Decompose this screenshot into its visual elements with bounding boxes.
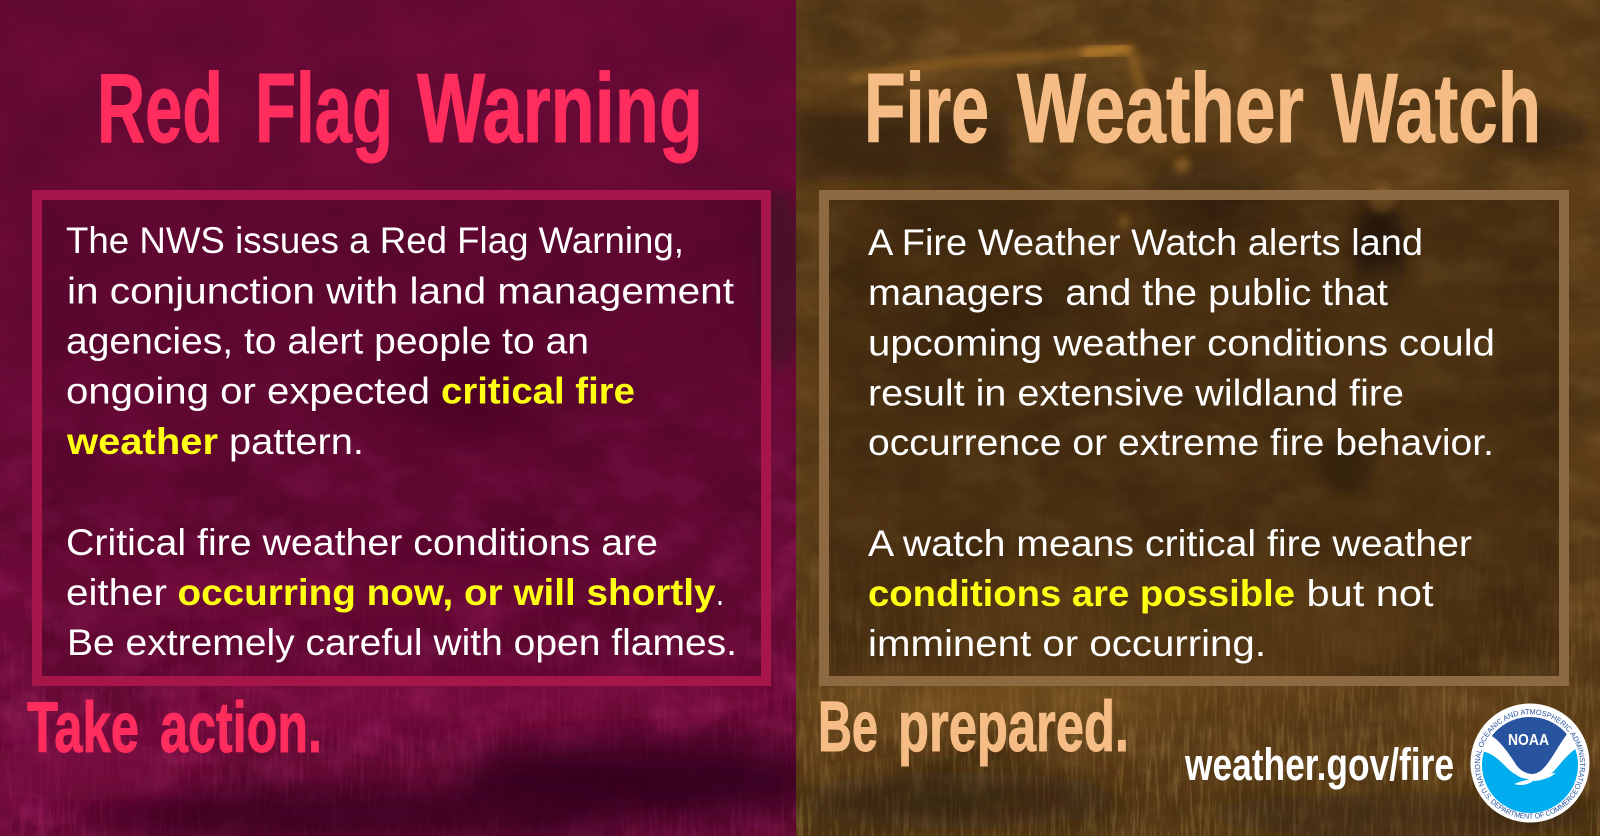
tagline: be prepared: Be	[818, 688, 878, 767]
box: fire weather watch description	[824, 195, 1564, 681]
text: second paragraph: either	[66, 572, 167, 613]
text: first paragraph: result in extensive wildland fire	[868, 372, 1404, 414]
text: first paragraph: weather	[66, 421, 218, 462]
text: first paragraph: upcoming weather conditions could	[868, 322, 1495, 364]
tagline: take action: Take	[27, 689, 139, 768]
text: second paragraph: conditions are possible	[868, 573, 1295, 614]
text: second paragraph: Critical fire weather conditions are	[66, 522, 658, 563]
text: second paragraph: imminent or occurring.	[868, 623, 1266, 664]
text: second paragraph	[66, 522, 737, 663]
heading: red flag warning: Flag	[255, 53, 393, 163]
url: weather.gov/fire: weather.gov/fire	[1184, 739, 1454, 790]
tagline: take action	[27, 689, 322, 768]
heading: red flag warning: Red	[97, 53, 223, 163]
icon: NOAA logo: NOAA	[1508, 732, 1549, 749]
text: first paragraph: occurrence or extreme fire behavior.	[868, 422, 1494, 463]
heading: red flag warning: Warning	[417, 53, 703, 163]
tagline: be prepared	[818, 688, 1129, 767]
text: second paragraph: .	[716, 572, 724, 613]
text: second paragraph: Be extremely careful with open flames.	[67, 622, 737, 663]
text: first paragraph: The NWS issues a Red Flag Warning,	[66, 220, 684, 261]
background: magenta-tinted fire photo	[0, 0, 830, 836]
panel: fire weather watch	[796, 0, 1600, 836]
text: second paragraph: A watch means critical fire weather	[868, 523, 1472, 564]
text: first paragraph: managers and the public that	[868, 272, 1389, 313]
text: first paragraph: in conjunction with land management	[67, 270, 735, 312]
tagline: be prepared: prepared.	[898, 688, 1129, 767]
icon: NOAA logo	[1470, 704, 1590, 822]
heading: fire weather watch: Fire	[864, 53, 989, 163]
heading: red flag warning	[97, 53, 703, 163]
tagline: take action: action.	[160, 689, 322, 768]
text: first paragraph: agencies, to alert people to an	[66, 320, 589, 362]
icon: NOAA logo: U.S. DEPARTMENT OF COMMERCE	[1482, 788, 1578, 819]
icon: NOAA logo: NATIONAL OCEANIC AND ATMOSPHERIC ADMINISTRATION	[1474, 709, 1586, 789]
text: first paragraph: A Fire Weather Watch alerts land	[868, 222, 1423, 263]
text: second paragraph	[868, 523, 1472, 664]
heading: fire weather watch: Weather	[1017, 53, 1304, 163]
box: red flag warning description	[37, 195, 766, 681]
heading: fire weather watch	[864, 53, 1541, 163]
text: second paragraph: occurring now, or will shortly	[178, 572, 716, 613]
panel: red flag warning	[0, 0, 830, 836]
text: first paragraph	[66, 220, 735, 462]
text: first paragraph: pattern.	[229, 421, 364, 462]
text: first paragraph	[868, 222, 1495, 463]
text: first paragraph: ongoing or expected	[66, 370, 430, 412]
text: first paragraph: critical fire	[441, 370, 635, 412]
background: amber-tinted fire photo	[790, 0, 1600, 836]
text: second paragraph: but not	[1306, 573, 1434, 614]
